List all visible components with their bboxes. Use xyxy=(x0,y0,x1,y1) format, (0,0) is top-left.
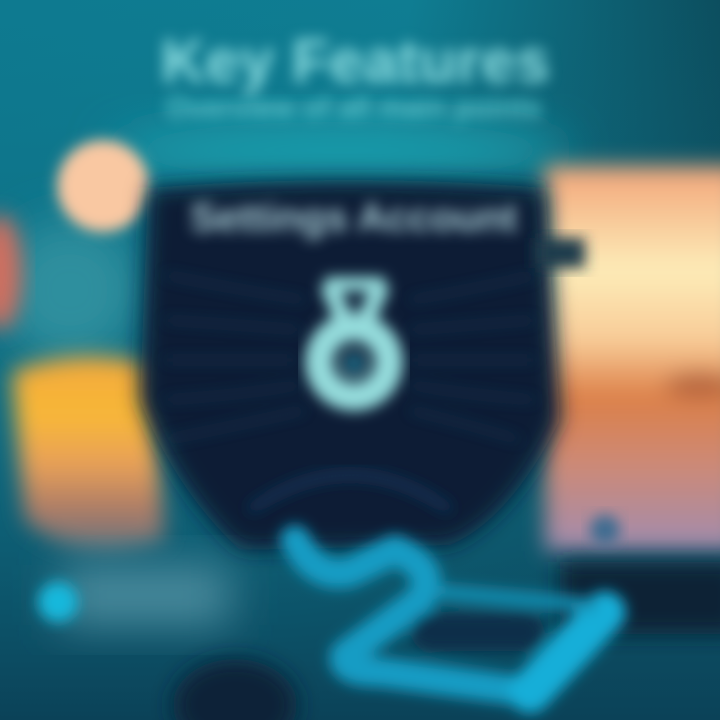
sunset panel: right xyxy=(545,166,720,551)
lower arch xyxy=(250,475,450,510)
subtitle: Overview of all main points xyxy=(166,92,542,124)
laptop icon xyxy=(295,540,605,692)
small blue marker xyxy=(590,515,620,545)
bottom dark band right xyxy=(560,562,720,634)
peach circle xyxy=(57,140,149,232)
cyan dot xyxy=(38,582,78,622)
sun panel: left xyxy=(12,356,165,551)
panel stripes xyxy=(165,275,535,440)
title: Key Features xyxy=(161,27,550,95)
bright band under title xyxy=(110,122,570,178)
left teal glow xyxy=(0,220,140,360)
bottom teal haze xyxy=(60,565,230,625)
dark blob xyxy=(173,659,297,720)
left edge glow xyxy=(0,214,22,330)
panel heading: Settings Account xyxy=(190,196,517,240)
medal icon xyxy=(319,277,389,397)
dark central panel xyxy=(140,180,560,550)
header shadow xyxy=(535,238,585,268)
